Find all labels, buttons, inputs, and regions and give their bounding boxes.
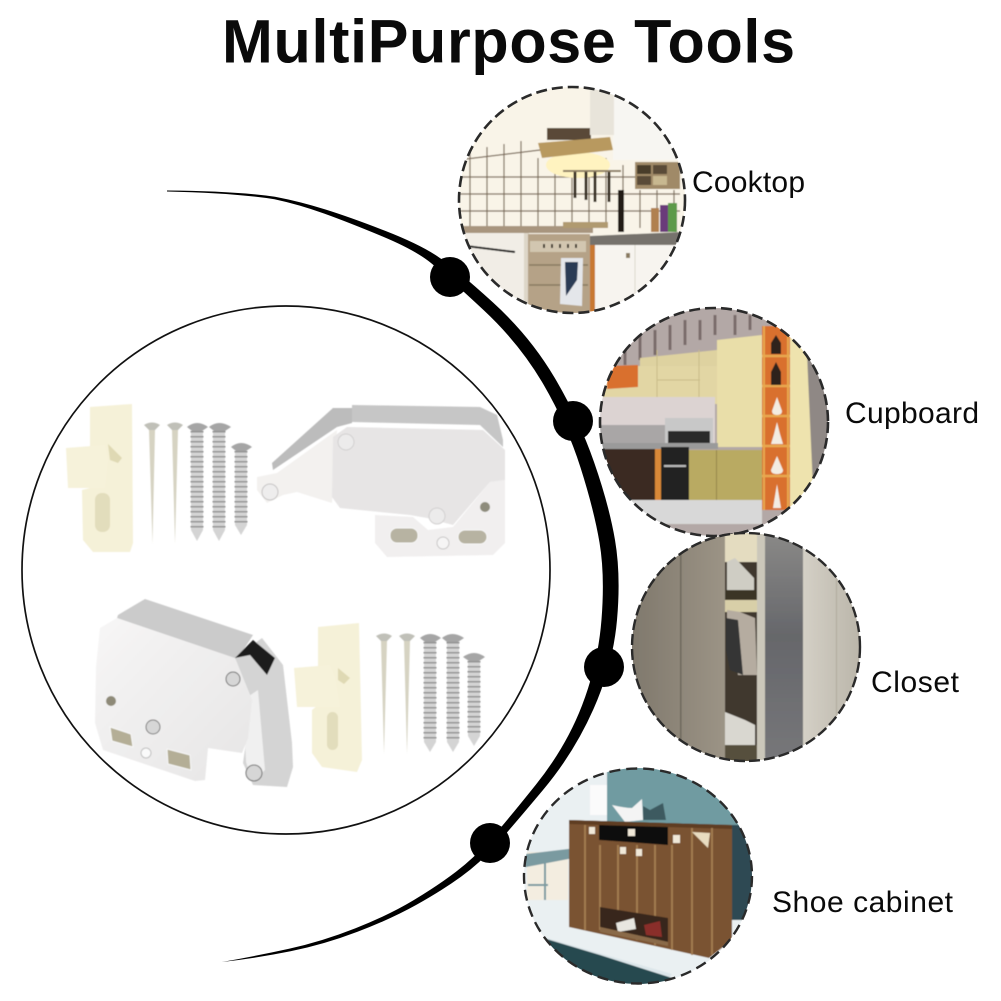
label: Shoe cabinet: Shoe cabinet [772, 886, 954, 919]
timeline dot: closet [584, 647, 624, 687]
title: MultiPurpose Tools [222, 8, 795, 76]
product: top plastic catch [66, 404, 133, 552]
photo circle: cupboard [598, 306, 835, 538]
photo circle: closet [630, 530, 863, 765]
product: top latch mechanism [257, 405, 505, 557]
label: Cooktop: Cooktop [692, 166, 805, 199]
product: bottom mounting pins and screws [376, 634, 485, 754]
product: top mounting pins and screws [144, 422, 252, 544]
label: Closet: Closet [871, 666, 960, 699]
photo circle: shoe cabinet [522, 767, 754, 990]
product: bottom plastic catch [294, 623, 362, 772]
timeline dot: cupboard [553, 401, 593, 441]
product: bottom latch mechanism [95, 599, 293, 787]
photo circle: cooktop kitchen [455, 85, 690, 318]
timeline dot: shoe cabinet [470, 823, 510, 863]
large curved timeline arc [167, 190, 619, 962]
label: Cupboard: Cupboard [845, 397, 979, 430]
timeline dot: cooktop [430, 257, 470, 297]
product panel: thin circle outline [22, 306, 550, 834]
